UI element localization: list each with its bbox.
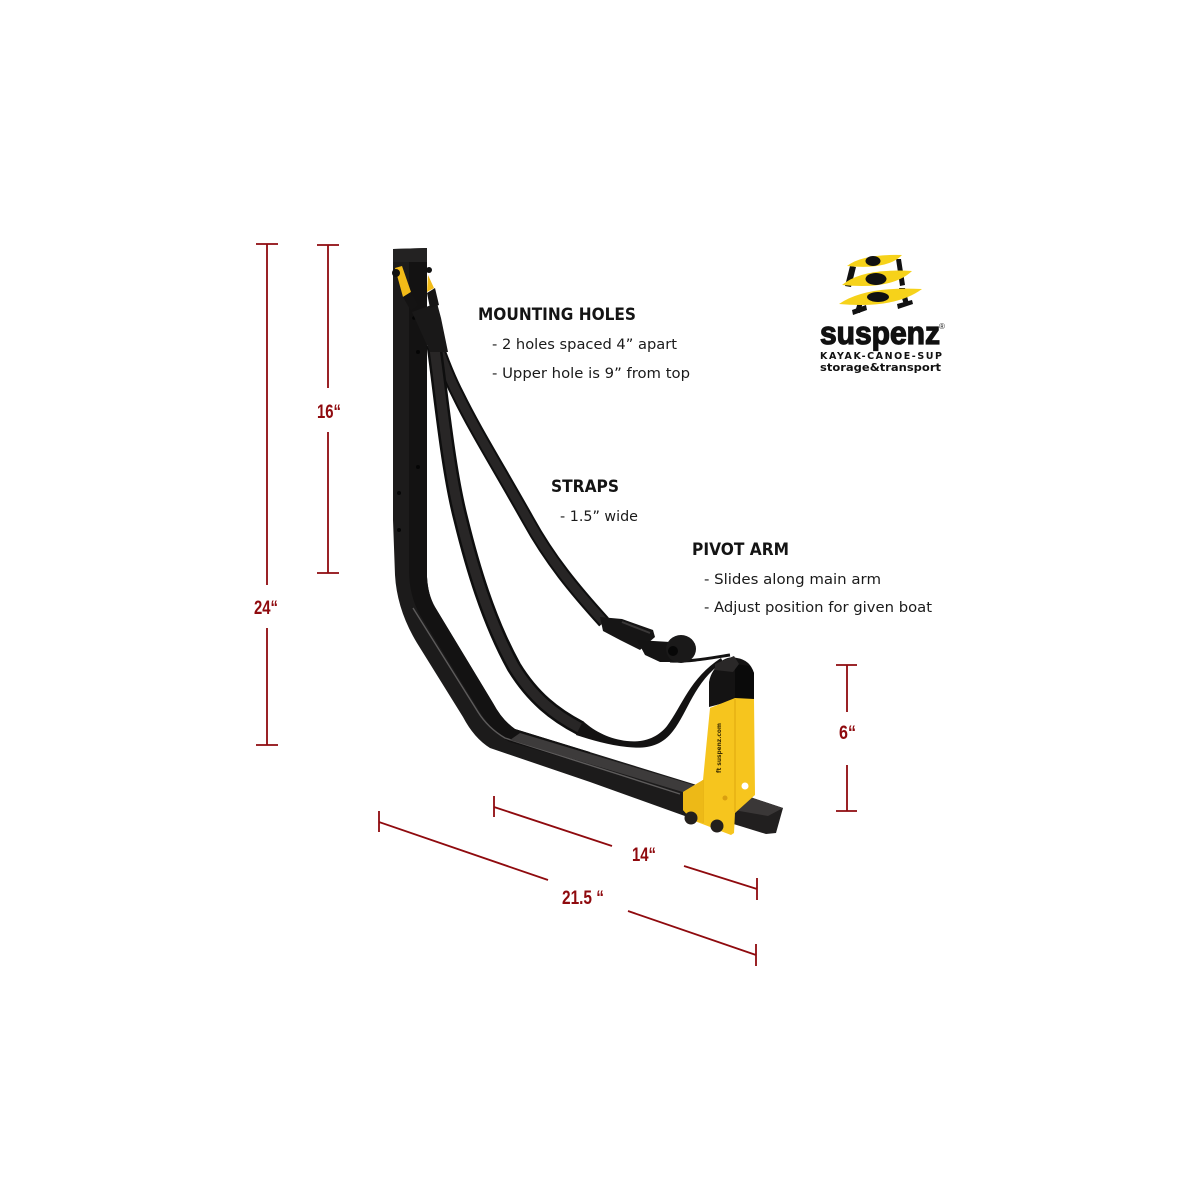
dimension: 21.5 inch length: 21.5 “ [562, 888, 604, 909]
strap over pivot [715, 656, 739, 672]
dimension: 21.5 inch length [379, 811, 756, 966]
right yellow tab [427, 275, 434, 292]
left yellow tab [395, 266, 411, 297]
pivot arm url: ft suspenz.com [715, 723, 723, 773]
text: straps: STRAPS [551, 477, 619, 497]
pivot hole [742, 782, 748, 790]
arm glossy reflection [413, 608, 680, 794]
dimension: 14 inch length: 14“ [632, 845, 656, 866]
logo tagline 1: KAYAK-CANOE-SUP [820, 351, 942, 362]
logo wordmark: suspenz [820, 315, 940, 351]
thin strap from roll to pivot arm [670, 655, 730, 661]
dimension: 6 inch height: 6“ [839, 723, 856, 744]
logo tagline 2: storage&transport [820, 361, 941, 374]
text: mounting holes: MOUNTING HOLES [478, 305, 636, 325]
rack: main L-shaped arm [393, 248, 783, 834]
top bracket with yellow tabs [392, 266, 439, 311]
bar end [727, 797, 783, 834]
yellow fold shading [703, 699, 735, 823]
arm top cap [393, 248, 427, 262]
text: mounting holes [478, 305, 690, 382]
pivot arm [683, 656, 755, 835]
horizontal bar top sheen [510, 733, 700, 796]
strap tapered bottom rising to pivot arm [576, 658, 723, 748]
straps [412, 303, 730, 748]
dimension: 16 inch height: 16“ [317, 402, 341, 423]
logo rack posts [845, 259, 913, 315]
pivot bolts [684, 812, 698, 824]
dimension: 24 inch height [254, 244, 278, 745]
text: straps [551, 477, 638, 525]
text: pivot arm: PIVOT ARM [692, 540, 789, 560]
dimension: 16 inch height [317, 245, 341, 573]
strap with buckle run [426, 312, 604, 622]
logo kayaks [847, 255, 902, 267]
strap tail [637, 640, 680, 662]
text: mounting holes: - 2 holes spaced 4” apart [492, 337, 677, 353]
mounting holes [397, 316, 420, 532]
pivot arm black top [709, 657, 754, 707]
dimension: 24 inch height: 24“ [254, 598, 278, 619]
strap buckle and roll [600, 617, 696, 663]
buckle [600, 617, 655, 650]
text: pivot arm: - Adjust position for given boat [704, 600, 932, 616]
dimension: 14 inch length [494, 796, 757, 900]
strap looping down wide section [434, 345, 580, 728]
text: pivot arm: - Slides along main arm [704, 572, 881, 588]
logo registered mark: ® [939, 322, 945, 331]
logo: suspenz [820, 255, 945, 374]
dimension: 6 inch height [836, 665, 857, 811]
main arm body [393, 248, 706, 820]
pivot arm yellow body [683, 698, 755, 835]
arm right face [409, 248, 590, 764]
strap roll [666, 635, 696, 663]
text: pivot arm [692, 540, 932, 616]
text: mounting holes: - Upper hole is 9” from top [492, 366, 690, 382]
text: straps: - 1.5” wide [560, 509, 638, 525]
strap upper junction [412, 303, 448, 352]
